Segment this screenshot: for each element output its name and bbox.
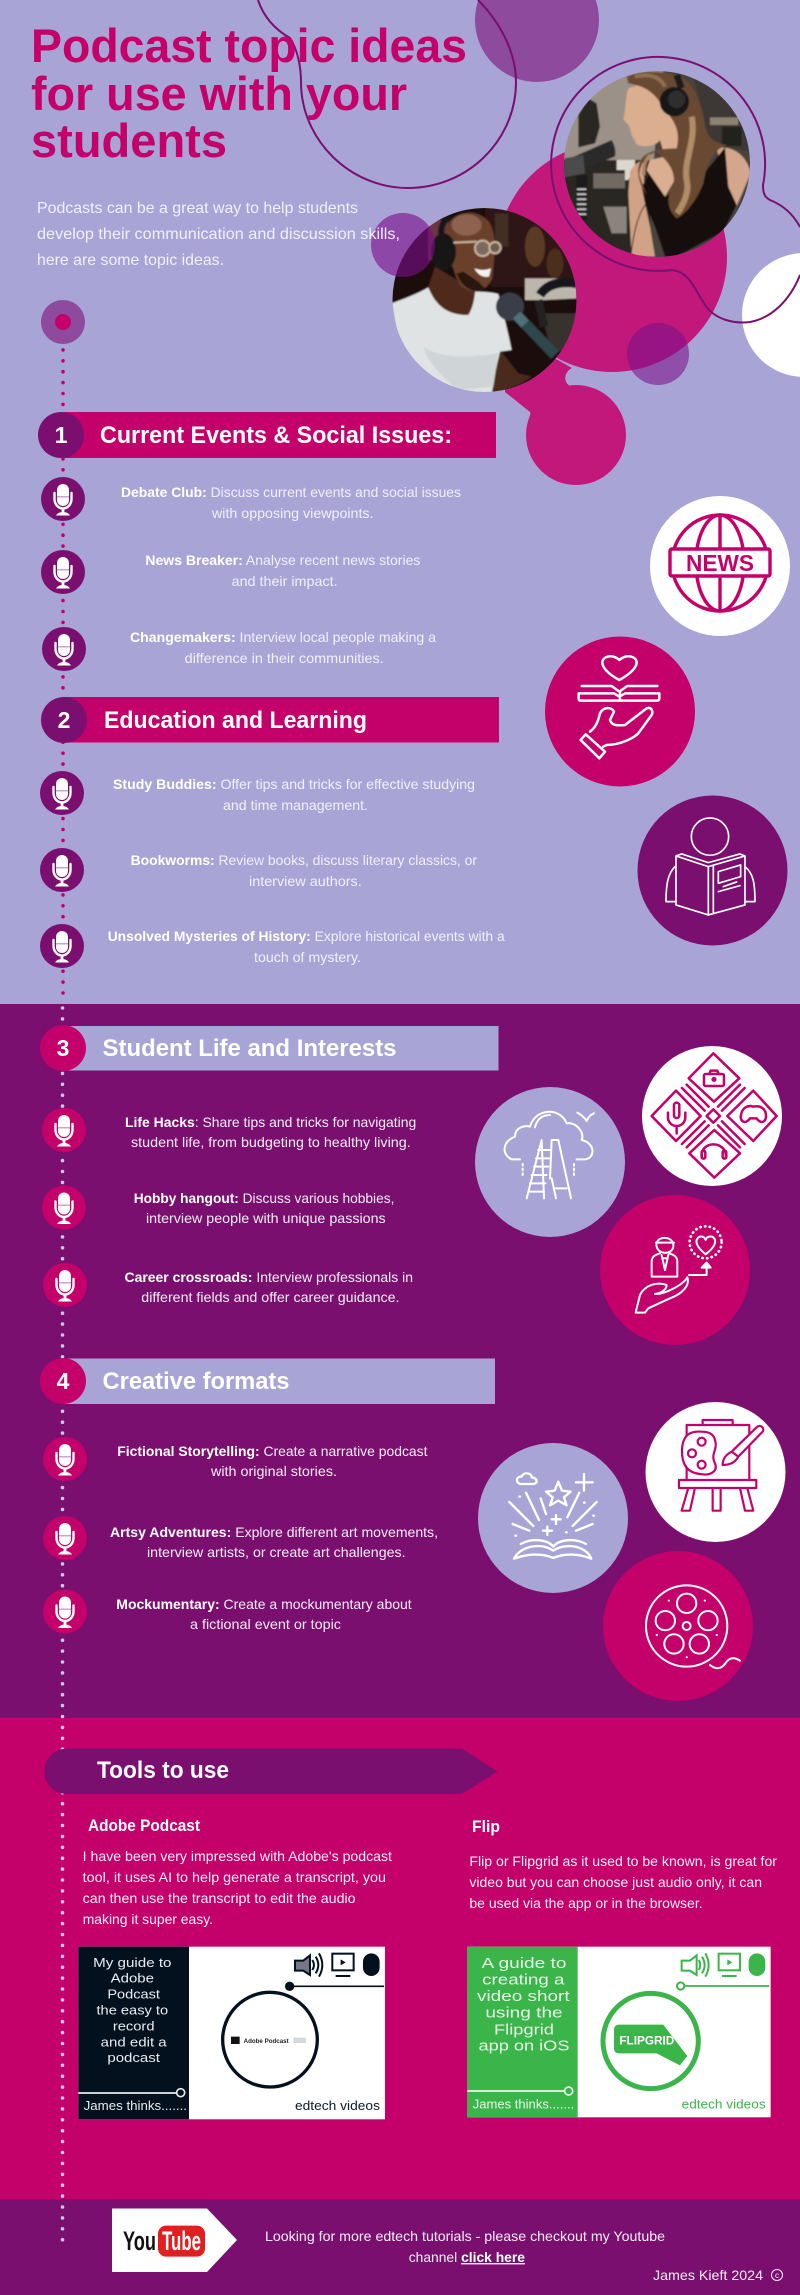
text: Flip description: be used via the app or in the browser.: [469, 1895, 703, 1911]
video thumbnail: Adobe Podcast guide: Adobe Podcast: [244, 2038, 289, 2045]
text: Hobby hangout: interview people with unique passions: [146, 1210, 386, 1226]
video thumbnail: Adobe Podcast guide: [78, 1947, 385, 2119]
mic bullet: Changemakers: [42, 627, 86, 671]
text: Artsy Adventures: Artsy Adventures: Explore different art movements,: [110, 1524, 438, 1540]
text: Career crossroads: Career crossroads: Interview professionals in: [124, 1269, 413, 1285]
text: Career crossroads: different fields and offer career guidance.: [141, 1289, 400, 1305]
photo: man podcaster: [392, 208, 576, 392]
video thumbnail: Flipgrid guide: edtech videos: [682, 2097, 766, 2111]
text: Adobe Podcast description: I have been very impressed with Adobe's podcast: [83, 1848, 392, 1864]
section 2 header: 2: [58, 707, 70, 733]
video thumbnail: Flipgrid guide: James thinks.......: [473, 2097, 574, 2111]
video thumbnail: Flipgrid guide: FLIPGRID: [619, 2033, 675, 2047]
text: Study Buddies: Study Buddies: Offer tips and tricks for effective studying: [113, 776, 475, 792]
decorative purple circle top: [475, 0, 599, 82]
title: Podcast topic ideas: [31, 19, 467, 72]
section 2 header: Education and Learning: [104, 707, 367, 734]
text: Fictional Storytelling: [117, 1443, 428, 1479]
video thumbnail: Flipgrid guide: creating a: [482, 1972, 566, 1988]
section 2 header: [41, 697, 499, 743]
footer text: channel click here: [409, 2249, 525, 2265]
icon: news globe: NEWS: [686, 550, 754, 576]
section 3 header: Student Life and Interests: [102, 1035, 396, 1062]
text: Debate Club: Debate Club: Discuss current events and social issues: [121, 484, 461, 500]
mic bullet: Artsy Adventures: [43, 1516, 87, 1560]
heading: Adobe Podcast: Adobe Podcast: [88, 1817, 200, 1835]
decorative small purple circle over photo: [371, 213, 435, 277]
icon: magic book: [478, 1443, 628, 1593]
tools banner: [44, 1749, 498, 1794]
decorative pink blob: [497, 142, 727, 485]
video thumbnail: Adobe Podcast guide: podcast: [107, 2051, 161, 2065]
dotted timeline: [61, 339, 65, 2247]
text: Bookworms: [131, 852, 477, 889]
text: Hobby hangout: [134, 1190, 394, 1226]
text: Fictional Storytelling: Fictional Storytelling: Create a narrative podcast: [117, 1443, 428, 1459]
icon: news globe: [650, 496, 790, 636]
decorative outline ring around woman: [551, 57, 800, 322]
section 1 header: [38, 412, 496, 458]
decorative outline blob left: [258, 0, 516, 188]
section 4 header: Creative formats: [102, 1368, 290, 1395]
icon: cloud and ladder: [475, 1087, 625, 1237]
section 1 header: 1: [55, 422, 68, 448]
icon: film reel: [603, 1551, 753, 1701]
text: Bookworms: interview authors.: [249, 873, 362, 889]
text: Artsy Adventures: interview artists, or create art challenges.: [147, 1544, 406, 1560]
mic bullet: Hobby hangout: [42, 1186, 86, 1230]
intro text: develop their communication and discussion skills,: [37, 226, 400, 243]
footer text: Looking for more edtech tutorials - please checkout my Youtube: [265, 2228, 665, 2244]
text: Career crossroads: [124, 1269, 413, 1305]
decorative white circle: [742, 253, 800, 377]
text: Mockumentary: Mockumentary: Create a mockumentary about: [116, 1596, 412, 1612]
intro text: Podcasts can be a great way to help students: [37, 200, 358, 217]
video thumbnail: Flipgrid guide: using the: [485, 2005, 563, 2021]
text: Flip description: [469, 1853, 777, 1911]
intro text: here are some topic ideas.: [37, 252, 224, 269]
tools banner: Tools to use: [97, 1757, 229, 1784]
text: Debate Club: with opposing viewpoints.: [211, 505, 374, 521]
text: Adobe Podcast description: making it super easy.: [83, 1911, 213, 1927]
intro text: [37, 200, 400, 269]
text: News Breaker: [145, 552, 420, 589]
YouTube logo: You: [123, 2226, 156, 2256]
credit: James Kieft 2024: [653, 2267, 763, 2283]
mic bullet: Mockumentary: [43, 1590, 87, 1634]
section 4 header: [40, 1358, 495, 1404]
section 4 header: 4: [57, 1368, 70, 1394]
panel: pink background: [0, 1718, 800, 2199]
footer text: [265, 2228, 665, 2265]
mic bullet: Fictional Storytelling: [43, 1437, 87, 1481]
text: Mockumentary: a fictional event or topic: [190, 1616, 341, 1632]
credit: c: [775, 2271, 779, 2280]
video thumbnail: Flipgrid guide: Flipgrid: [494, 2022, 554, 2038]
text: Life Hacks: student life, from budgeting to healthy living.: [131, 1134, 411, 1150]
section 1 header: Current Events & Social Issues:: [100, 422, 452, 449]
icon: career hand and heart: [600, 1195, 750, 1345]
text: Artsy Adventures: [110, 1524, 438, 1560]
mic bullet: Study Buddies: [40, 771, 84, 815]
icon: book and hand: [545, 636, 695, 786]
text: Flip description: Flip or Flipgrid as it used to be known, is great for: [469, 1853, 777, 1869]
video thumbnail: Adobe Podcast guide: the easy to: [96, 2004, 168, 2018]
text: News Breaker: News Breaker: Analyse recent news stories: [145, 552, 420, 568]
mic bullet: Career crossroads: [43, 1263, 87, 1307]
YouTube logo: Tube: [162, 2226, 201, 2256]
video thumbnail: Flipgrid guide: video short: [477, 1989, 570, 2005]
video thumbnail: Flipgrid guide: [467, 1947, 771, 2117]
mic bullet: Unsolved Mysteries: [40, 924, 84, 968]
decorative small purple circle on blob: [627, 323, 689, 385]
text: Adobe Podcast description: [83, 1848, 392, 1927]
video thumbnail: Adobe Podcast guide: edtech videos: [295, 2099, 380, 2113]
mic bullet: Bookworms: [40, 848, 84, 892]
text: Hobby hangout: Hobby hangout: Discuss various hobbies,: [134, 1190, 394, 1206]
video thumbnail: Adobe Podcast guide: James thinks.......: [84, 2099, 187, 2113]
text: Debate Club: [121, 484, 461, 521]
text: Changemakers: [130, 629, 436, 666]
mic bullet: Life Hacks: [42, 1108, 86, 1152]
mic bullet: Debate Club: [41, 477, 85, 521]
mic bullet: News Breaker: [41, 550, 85, 594]
video thumbnail: Adobe Podcast guide: and edit a: [101, 2035, 168, 2049]
text: Study Buddies: and time management.: [223, 797, 368, 813]
heading: Flip: Flip: [472, 1818, 500, 1836]
panel: lilac background: [0, 0, 800, 1004]
text: Life Hacks: Life Hacks: Share tips and tricks for navigating: [125, 1114, 416, 1130]
section 3 header: 3: [57, 1035, 69, 1061]
photo: woman podcaster: [564, 71, 750, 257]
icon: hobby diamonds: [642, 1046, 782, 1186]
text: Fictional Storytelling: with original stories.: [210, 1463, 337, 1479]
title: [31, 19, 467, 167]
timeline start marker: [41, 300, 85, 344]
text: Bookworms: Bookworms: Review books, discuss literary classics, or: [131, 852, 477, 868]
text: Changemakers: Changemakers: Interview local people making a: [130, 629, 436, 645]
text: News Breaker: and their impact.: [232, 573, 338, 589]
icon: easel: [646, 1402, 786, 1542]
icon: person reading: [638, 796, 788, 946]
video thumbnail: Flipgrid guide: app on iOS: [478, 2039, 570, 2055]
panel: purple background: [0, 1004, 800, 1718]
YouTube logo: [112, 2208, 237, 2272]
title: students: [31, 114, 227, 167]
text: Unsolved Mysteries: [108, 928, 505, 965]
section 3 header: [40, 1025, 498, 1071]
text: Unsolved Mysteries: touch of mystery.: [254, 949, 361, 965]
text: Flip description: video but you can choose just audio only, it can: [469, 1874, 762, 1890]
video thumbnail: Adobe Podcast guide: record: [113, 2020, 154, 2034]
text: Study Buddies: [113, 776, 475, 813]
text: Adobe Podcast description: tool, it uses AI to help generate a transcript, you: [83, 1869, 386, 1885]
text: Changemakers: difference in their communities.: [185, 650, 384, 666]
text: Adobe Podcast description: can then use the transcript to edit the audio: [83, 1890, 356, 1906]
panel: footer background: [0, 2199, 800, 2295]
video thumbnail: Flipgrid guide: A guide to: [481, 1956, 566, 1972]
video thumbnail: Adobe Podcast guide: Adobe: [111, 1972, 154, 1986]
video thumbnail: Adobe Podcast guide: My guide to: [93, 1956, 171, 1970]
title: for use with your: [31, 67, 407, 120]
text: Mockumentary: [116, 1596, 412, 1632]
text: Unsolved Mysteries: Unsolved Mysteries of History: Explore historical events with a: [108, 928, 505, 944]
text: Life Hacks: [125, 1114, 416, 1150]
video thumbnail: Adobe Podcast guide: Podcast: [107, 1988, 161, 2002]
